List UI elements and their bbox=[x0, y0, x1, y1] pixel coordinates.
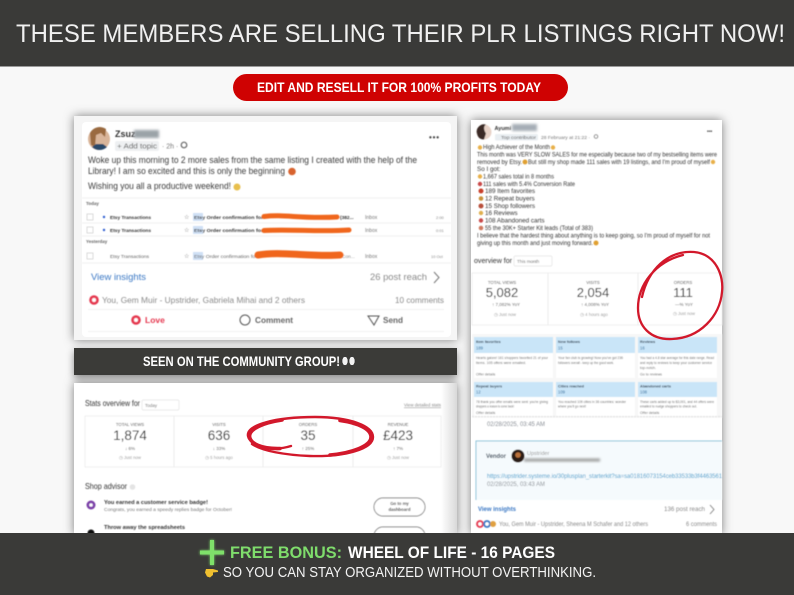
stats heading: overview for bbox=[474, 256, 512, 265]
insights row: 136 post reach bbox=[664, 506, 705, 513]
stats table: 111 bbox=[673, 285, 693, 300]
insight tiles: 16 bbox=[640, 346, 645, 350]
free bonus headline: WHEEL OF LIFE - 16 PAGES bbox=[348, 544, 555, 562]
stats table: 636 bbox=[208, 428, 230, 443]
email list: Etsy Order confirmation for bbox=[194, 215, 263, 221]
stats table: ◷ Just now bbox=[673, 311, 696, 316]
action buttons: Comment bbox=[255, 315, 293, 325]
insight tiles: 189 bbox=[476, 346, 484, 350]
author name: Zsuz bbox=[115, 129, 136, 139]
stats table: ↑ 25% bbox=[302, 446, 314, 451]
stats table bbox=[472, 273, 722, 325]
insight tiles: Reviews bbox=[640, 340, 655, 344]
post text: Library! I am so excited and this is only the beginning bbox=[88, 166, 285, 177]
insights row bbox=[478, 505, 714, 514]
post text: removed by Etsy. bbox=[477, 159, 522, 166]
email list: ☆ bbox=[184, 253, 189, 260]
action buttons: Love bbox=[145, 315, 165, 325]
add topic tag and time bbox=[115, 141, 187, 151]
insights row: View insights bbox=[478, 506, 516, 513]
vendor message box bbox=[476, 441, 722, 500]
email list: (382... bbox=[340, 215, 354, 221]
reactions row: You, Gem Muir - Upstrider, Gabriela Mihai and 2 others bbox=[102, 295, 305, 305]
email list: ☆ bbox=[184, 214, 189, 221]
post text bbox=[88, 155, 417, 192]
post text: giving up this month and just moving forward. bbox=[477, 240, 593, 247]
post text: 1,667 sales total in 8 months bbox=[483, 174, 554, 180]
insight tiles: Abandoned carts bbox=[640, 384, 671, 388]
icon: pointing hand bbox=[205, 569, 218, 578]
insight tiles: 12 bbox=[476, 390, 481, 394]
stats heading: View detailed stats bbox=[404, 402, 442, 408]
stats table: ↑ 7,082% YoY bbox=[492, 302, 520, 307]
post text: Wishing you all a productive weekend! bbox=[88, 181, 231, 192]
stats table: TOTAL VIEWS bbox=[116, 422, 144, 427]
insight tiles: You reached 109 cities in 36 countries: wonder bbox=[558, 400, 627, 404]
stats table: ↑ 4,008% YoY bbox=[581, 302, 609, 307]
email list: Etsy Transactions bbox=[110, 254, 150, 260]
panel: stats overview screenshot bbox=[74, 383, 457, 545]
insight tiles: Your fan club is growing! Now you've got 236 bbox=[558, 356, 623, 360]
vendor message box: Upstrider bbox=[527, 451, 549, 457]
red hand-drawn circle: orders bbox=[638, 252, 722, 339]
earlier message timestamp: 02/28/2025, 03:45 AM bbox=[487, 422, 545, 428]
insight tiles: These carts added up to $3,001, and 44 offers were bbox=[640, 400, 714, 404]
stats table: TOTAL VIEWS bbox=[488, 280, 516, 285]
stats heading bbox=[85, 398, 442, 410]
top header banner bbox=[0, 0, 794, 67]
author meta: Ayumi bbox=[494, 126, 512, 132]
insight tiles: Hearts galore! 161 shoppers favorited 21 of your bbox=[476, 356, 549, 360]
shop advisor bbox=[85, 481, 425, 545]
email list: Today bbox=[86, 201, 99, 206]
insight tiles: New follows bbox=[558, 340, 580, 344]
post text: 12 Repeat buyers bbox=[485, 196, 535, 202]
stats table: ◷ Just now bbox=[387, 455, 410, 460]
email list: Etsy Transactions bbox=[110, 228, 151, 234]
post text: So I got: bbox=[477, 166, 501, 173]
free bonus headline bbox=[230, 544, 555, 562]
post text: 108 Abandoned carts bbox=[485, 218, 545, 224]
shop advisor: Shop advisor bbox=[85, 481, 127, 491]
insight tiles: 109 bbox=[558, 390, 566, 394]
stats heading: This month bbox=[517, 259, 540, 264]
emoji markers bbox=[478, 145, 715, 246]
insight tiles: Item favorites bbox=[476, 340, 501, 344]
stats table: REVENUE bbox=[388, 422, 409, 427]
red hand-drawn circle: orders bbox=[248, 417, 373, 456]
insight tiles: Cities reached bbox=[558, 384, 585, 388]
insights row: View insights bbox=[91, 272, 146, 283]
insight tiles: 78 thank you offer emails were sent: you're giving bbox=[476, 400, 548, 404]
insight tiles: Go to reviews bbox=[640, 372, 662, 376]
reactions row: 6 comments bbox=[686, 522, 717, 528]
stats table: 1,874 bbox=[113, 428, 147, 443]
email list: Etsy Order confirmation for bbox=[194, 228, 263, 234]
add topic tag and time: · 2h · bbox=[162, 144, 178, 150]
email list: Etsy Order confirmation for bbox=[194, 254, 257, 260]
email list: Inbox bbox=[365, 215, 378, 221]
stats table: VISITS bbox=[212, 422, 226, 427]
stats heading: Today bbox=[145, 403, 158, 408]
add topic tag and time: + Add topic bbox=[117, 144, 158, 150]
icon: green plus bbox=[200, 540, 224, 565]
stats heading: Stats overview for bbox=[85, 398, 140, 408]
bottom banner bbox=[0, 533, 794, 595]
post text: 189 Item favorites bbox=[485, 188, 535, 195]
stats table: ↓ 33% bbox=[213, 446, 225, 451]
insight tiles: Repeat buyers bbox=[476, 384, 502, 388]
post text: 16 Reviews bbox=[485, 210, 518, 217]
stats table: ↑ 7% bbox=[393, 446, 403, 451]
email list: 10 Oct bbox=[431, 254, 444, 259]
stats table: 2,054 bbox=[577, 285, 609, 300]
insight tiles: emailed to nudge shoppers to check out. bbox=[640, 404, 697, 408]
post text: I believe that the hardest thing about anything is to keep going, so I'm proud of myself for not bbox=[477, 232, 710, 240]
reactions row bbox=[477, 521, 717, 528]
free bonus headline: FREE BONUS: bbox=[230, 544, 342, 562]
insight tiles: shoppers a reason to come back! bbox=[476, 404, 514, 408]
red pill subtitle: EDIT AND RESELL IT FOR 100% PROFITS TODAY bbox=[257, 79, 542, 95]
panel: Ayumi post screenshot bbox=[471, 120, 722, 535]
post text: But still my shop made 111 sales with 19 listings, and I'm proud of myself bbox=[528, 159, 710, 166]
post text: High Achiever of the Month bbox=[483, 144, 550, 151]
email list: Con... bbox=[342, 254, 355, 260]
stats table: ◷ Just now bbox=[119, 455, 142, 460]
author meta: Top contributor bbox=[501, 135, 536, 141]
email list: 0:01 bbox=[436, 228, 445, 233]
email list: 2:00 bbox=[436, 215, 445, 220]
insight tiles: Offer details bbox=[476, 372, 496, 376]
shop advisor: Throw away the spreadsheets bbox=[104, 525, 185, 531]
stats table: 35 bbox=[300, 428, 316, 443]
shop advisor: You earned a customer service badge! bbox=[104, 500, 208, 506]
reactions row bbox=[88, 295, 444, 310]
shop advisor: dashboard bbox=[389, 507, 411, 512]
email list: ☆ bbox=[184, 227, 189, 234]
orange redaction scribbles bbox=[258, 216, 349, 255]
stats table bbox=[85, 416, 441, 467]
vendor message box: Vendor bbox=[486, 454, 507, 460]
stats table: ◷ 4 hours ago bbox=[580, 312, 608, 317]
bonus subtitle: SO YOU CAN STAY ORGANIZED WITHOUT OVERTHINKING. bbox=[223, 565, 596, 581]
icon: eyes bbox=[342, 356, 355, 366]
community group banner: SEEN ON THE COMMUNITY GROUP! bbox=[143, 353, 340, 369]
post text bbox=[477, 144, 717, 247]
insight tiles: top-notch. bbox=[640, 366, 656, 370]
insights row bbox=[91, 272, 439, 283]
stats table: 5,082 bbox=[486, 285, 518, 300]
post text: Woke up this morning to 2 more sales from the same listing I created with the help of the bbox=[88, 155, 417, 166]
stats table: ORDERS bbox=[299, 422, 317, 427]
action buttons bbox=[88, 315, 444, 332]
reactions row: You, Gem Muir - Upstrider, Sheena M Schafer and 12 others bbox=[499, 522, 648, 528]
post text: This month was VERY SLOW SALES for me especially because two of my bestselling items were bbox=[477, 151, 717, 158]
insight tiles: Offer details bbox=[640, 411, 660, 415]
stats table: £423 bbox=[383, 428, 413, 443]
email list: Inbox bbox=[365, 254, 378, 260]
insight tiles: items. 105 offers were emailed. bbox=[476, 361, 526, 365]
insight tiles: You had a 4.8 star average for this date range. Read bbox=[640, 356, 714, 360]
vendor message box: https://upstrider.systeme.io/30plusplan_starterkit?sa=sa01816073154ceb33533b3f4463561 bbox=[487, 473, 722, 480]
email list: Yesterday bbox=[86, 239, 108, 244]
insight tiles: 108 bbox=[640, 390, 648, 394]
insight tiles bbox=[472, 334, 722, 418]
shop advisor: Go to my bbox=[390, 501, 409, 506]
email list: Etsy Transactions bbox=[110, 215, 151, 221]
stats table: ◷ 5 hours ago bbox=[205, 455, 233, 460]
author name bbox=[115, 129, 159, 139]
stats table: VISITS bbox=[586, 280, 600, 285]
red pill subtitle bbox=[233, 74, 568, 101]
author meta bbox=[494, 124, 713, 141]
community group banner bbox=[74, 348, 457, 375]
action buttons: Send bbox=[383, 315, 403, 325]
reactions row: 10 comments bbox=[395, 295, 444, 305]
stats table: ORDERS bbox=[674, 280, 692, 285]
stats table: ↓ 6% bbox=[125, 446, 135, 451]
more menu: ••• bbox=[429, 133, 439, 142]
avatar: Ayumi bbox=[476, 124, 492, 140]
post text: 55 the 30K+ Starter Kit leads (Total of 383) bbox=[485, 225, 593, 232]
shop advisor: Congrats, you earned a speedy replies badge for October! bbox=[104, 507, 232, 512]
email list: Inbox bbox=[365, 228, 378, 234]
insight tiles: and reply to reviews to keep your customer service bbox=[640, 361, 712, 365]
stats heading bbox=[474, 256, 552, 266]
avatar: Zsuz bbox=[88, 127, 110, 150]
stats table: —% YoY bbox=[675, 302, 693, 307]
insights row: 26 post reach bbox=[370, 272, 427, 283]
post text: 111 sales with 5.4% Conversion Rate bbox=[483, 181, 575, 188]
author meta: 28 February at 21:22 · bbox=[541, 135, 590, 141]
insight tiles: 15 bbox=[558, 346, 563, 350]
insight tiles: where you'll go next! bbox=[558, 404, 586, 408]
stats table: ◷ Just now bbox=[494, 312, 517, 317]
insight tiles: followers overall - keep up the good work. bbox=[558, 361, 614, 365]
vendor message box: 02/28/2025, 03:43 AM bbox=[487, 482, 545, 488]
insight tiles: Offer details bbox=[476, 411, 496, 415]
author meta: ••• bbox=[707, 129, 713, 135]
post text: 15 Shop followers bbox=[485, 203, 535, 210]
email list bbox=[82, 198, 451, 332]
